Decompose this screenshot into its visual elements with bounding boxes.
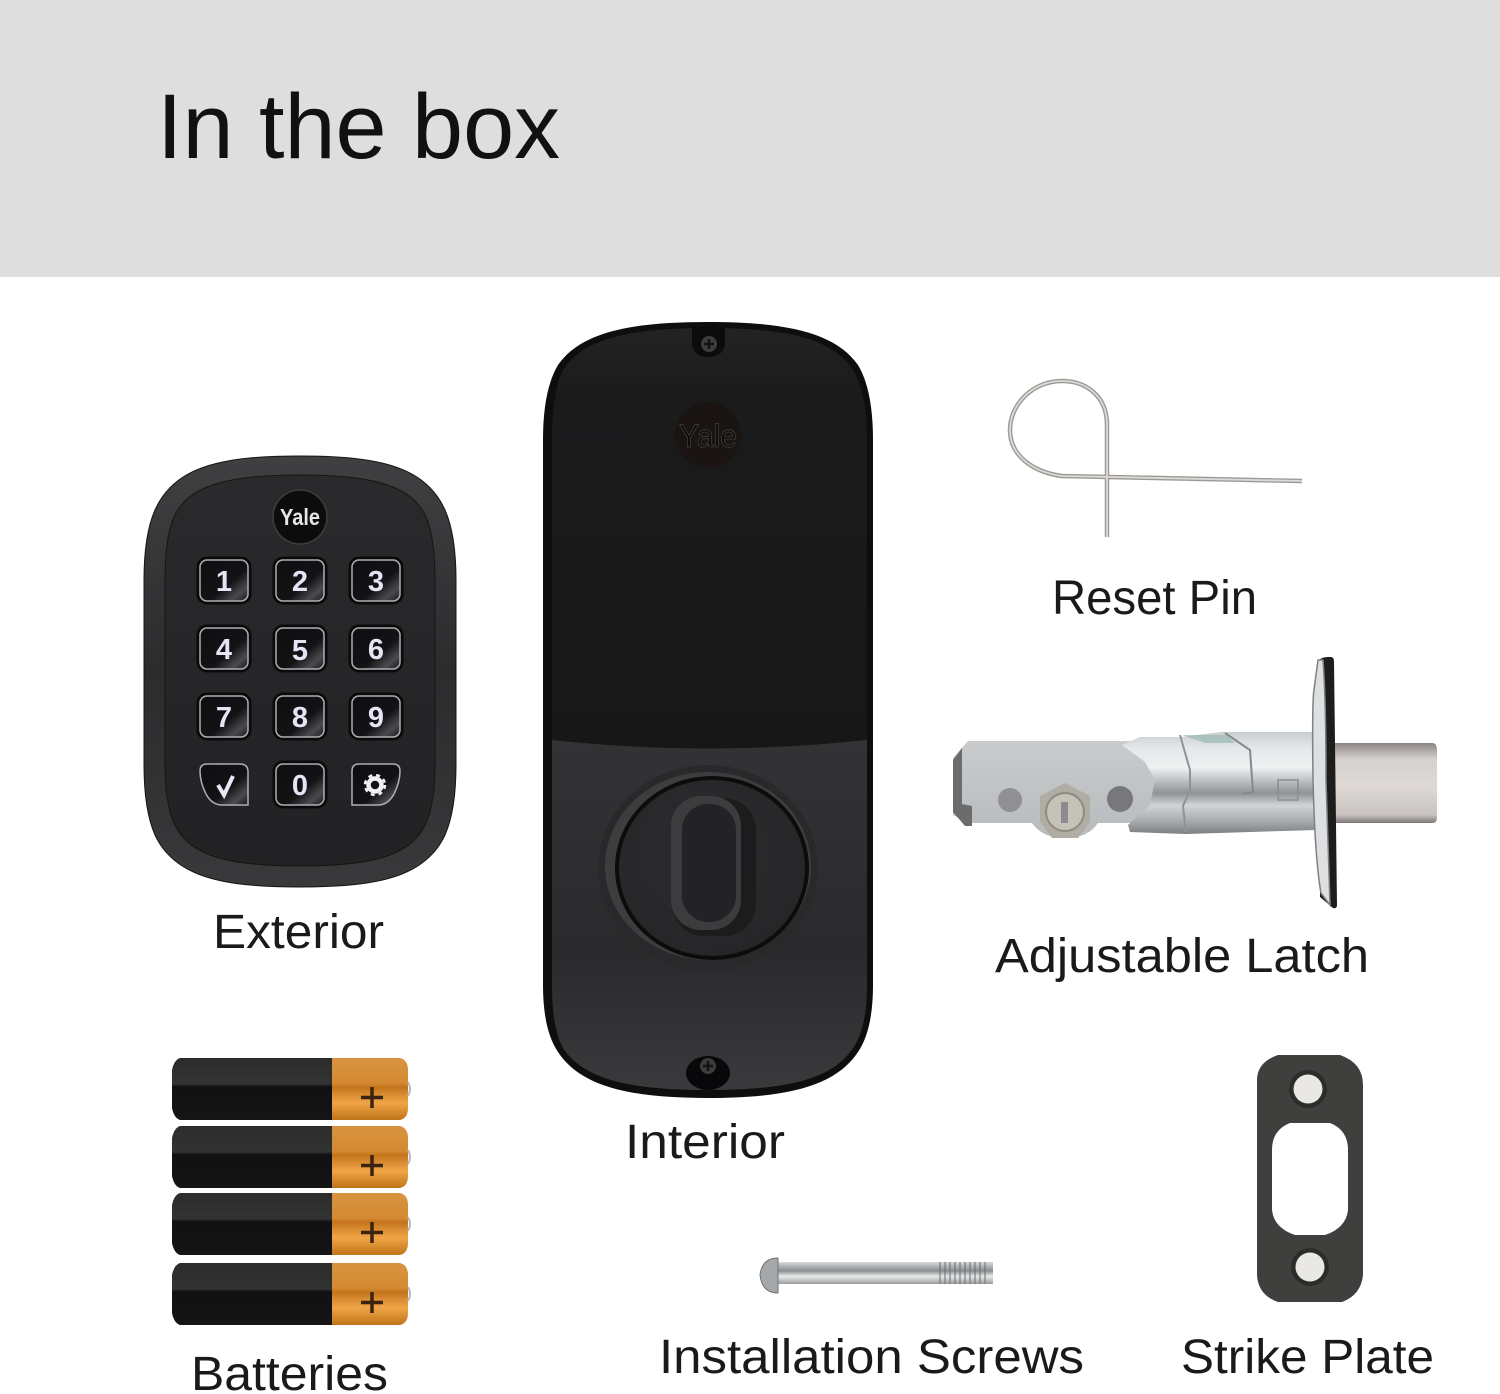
keypad buttons: 8 xyxy=(292,702,308,734)
battery 4 xyxy=(172,1263,410,1325)
thumb turn xyxy=(598,765,818,971)
label: Strike Plate: Strike Plate xyxy=(1181,1331,1434,1384)
top screw xyxy=(692,327,725,357)
bottom screw xyxy=(686,1056,730,1090)
interior outer housing xyxy=(543,322,873,1098)
label: Reset Pin: Reset Pin xyxy=(1052,572,1257,625)
latch spindle hub xyxy=(1040,783,1090,838)
keypad buttons: 0 xyxy=(292,770,308,802)
battery 1 xyxy=(172,1058,410,1120)
label: Installation Screws: Installation Screws xyxy=(659,1331,1084,1384)
batteries xyxy=(172,1058,410,1325)
keypad buttons: 9 xyxy=(368,702,384,734)
latch holes xyxy=(998,788,1022,812)
keypad buttons xyxy=(199,559,401,806)
keypad buttons: 4 xyxy=(216,634,232,666)
header band xyxy=(0,0,1500,277)
Yale emboss: Yale xyxy=(679,418,737,454)
latch side plate xyxy=(953,741,1160,838)
latch cylinder xyxy=(1122,732,1317,834)
latch face plate xyxy=(1319,657,1337,908)
interior unit xyxy=(543,322,873,1098)
exterior keypad xyxy=(144,456,456,887)
label: Exterior: Exterior xyxy=(213,906,384,959)
Yale emboss xyxy=(675,402,741,468)
Yale badge xyxy=(273,490,327,544)
reset pin xyxy=(1010,381,1302,537)
latch bolt xyxy=(1330,743,1437,823)
battery 3 xyxy=(172,1193,410,1255)
strike plate xyxy=(1257,1055,1363,1302)
strike plate bottom hole xyxy=(1291,1248,1329,1286)
interior cover lower xyxy=(552,740,867,1090)
adjustable latch xyxy=(953,657,1437,908)
keypad buttons: 3 xyxy=(368,566,384,598)
keypad face plate xyxy=(165,475,435,866)
check icon xyxy=(218,776,233,795)
keypad buttons: 6 xyxy=(368,634,384,666)
Yale badge: Yale xyxy=(280,504,320,530)
keypad buttons: 5 xyxy=(292,635,308,667)
keypad bezel xyxy=(144,456,456,887)
label: Adjustable Latch: Adjustable Latch xyxy=(995,930,1369,983)
strike plate top hole xyxy=(1289,1070,1327,1108)
battery 2 xyxy=(172,1126,410,1188)
installation screw xyxy=(760,1258,993,1293)
keypad buttons: 1 xyxy=(216,566,232,598)
label: Interior: Interior xyxy=(625,1116,785,1169)
interior cover upper xyxy=(552,328,867,755)
title: In the box xyxy=(157,76,560,178)
gear icon xyxy=(365,775,385,795)
keypad buttons: 7 xyxy=(216,702,232,734)
keypad buttons: 2 xyxy=(292,566,308,598)
